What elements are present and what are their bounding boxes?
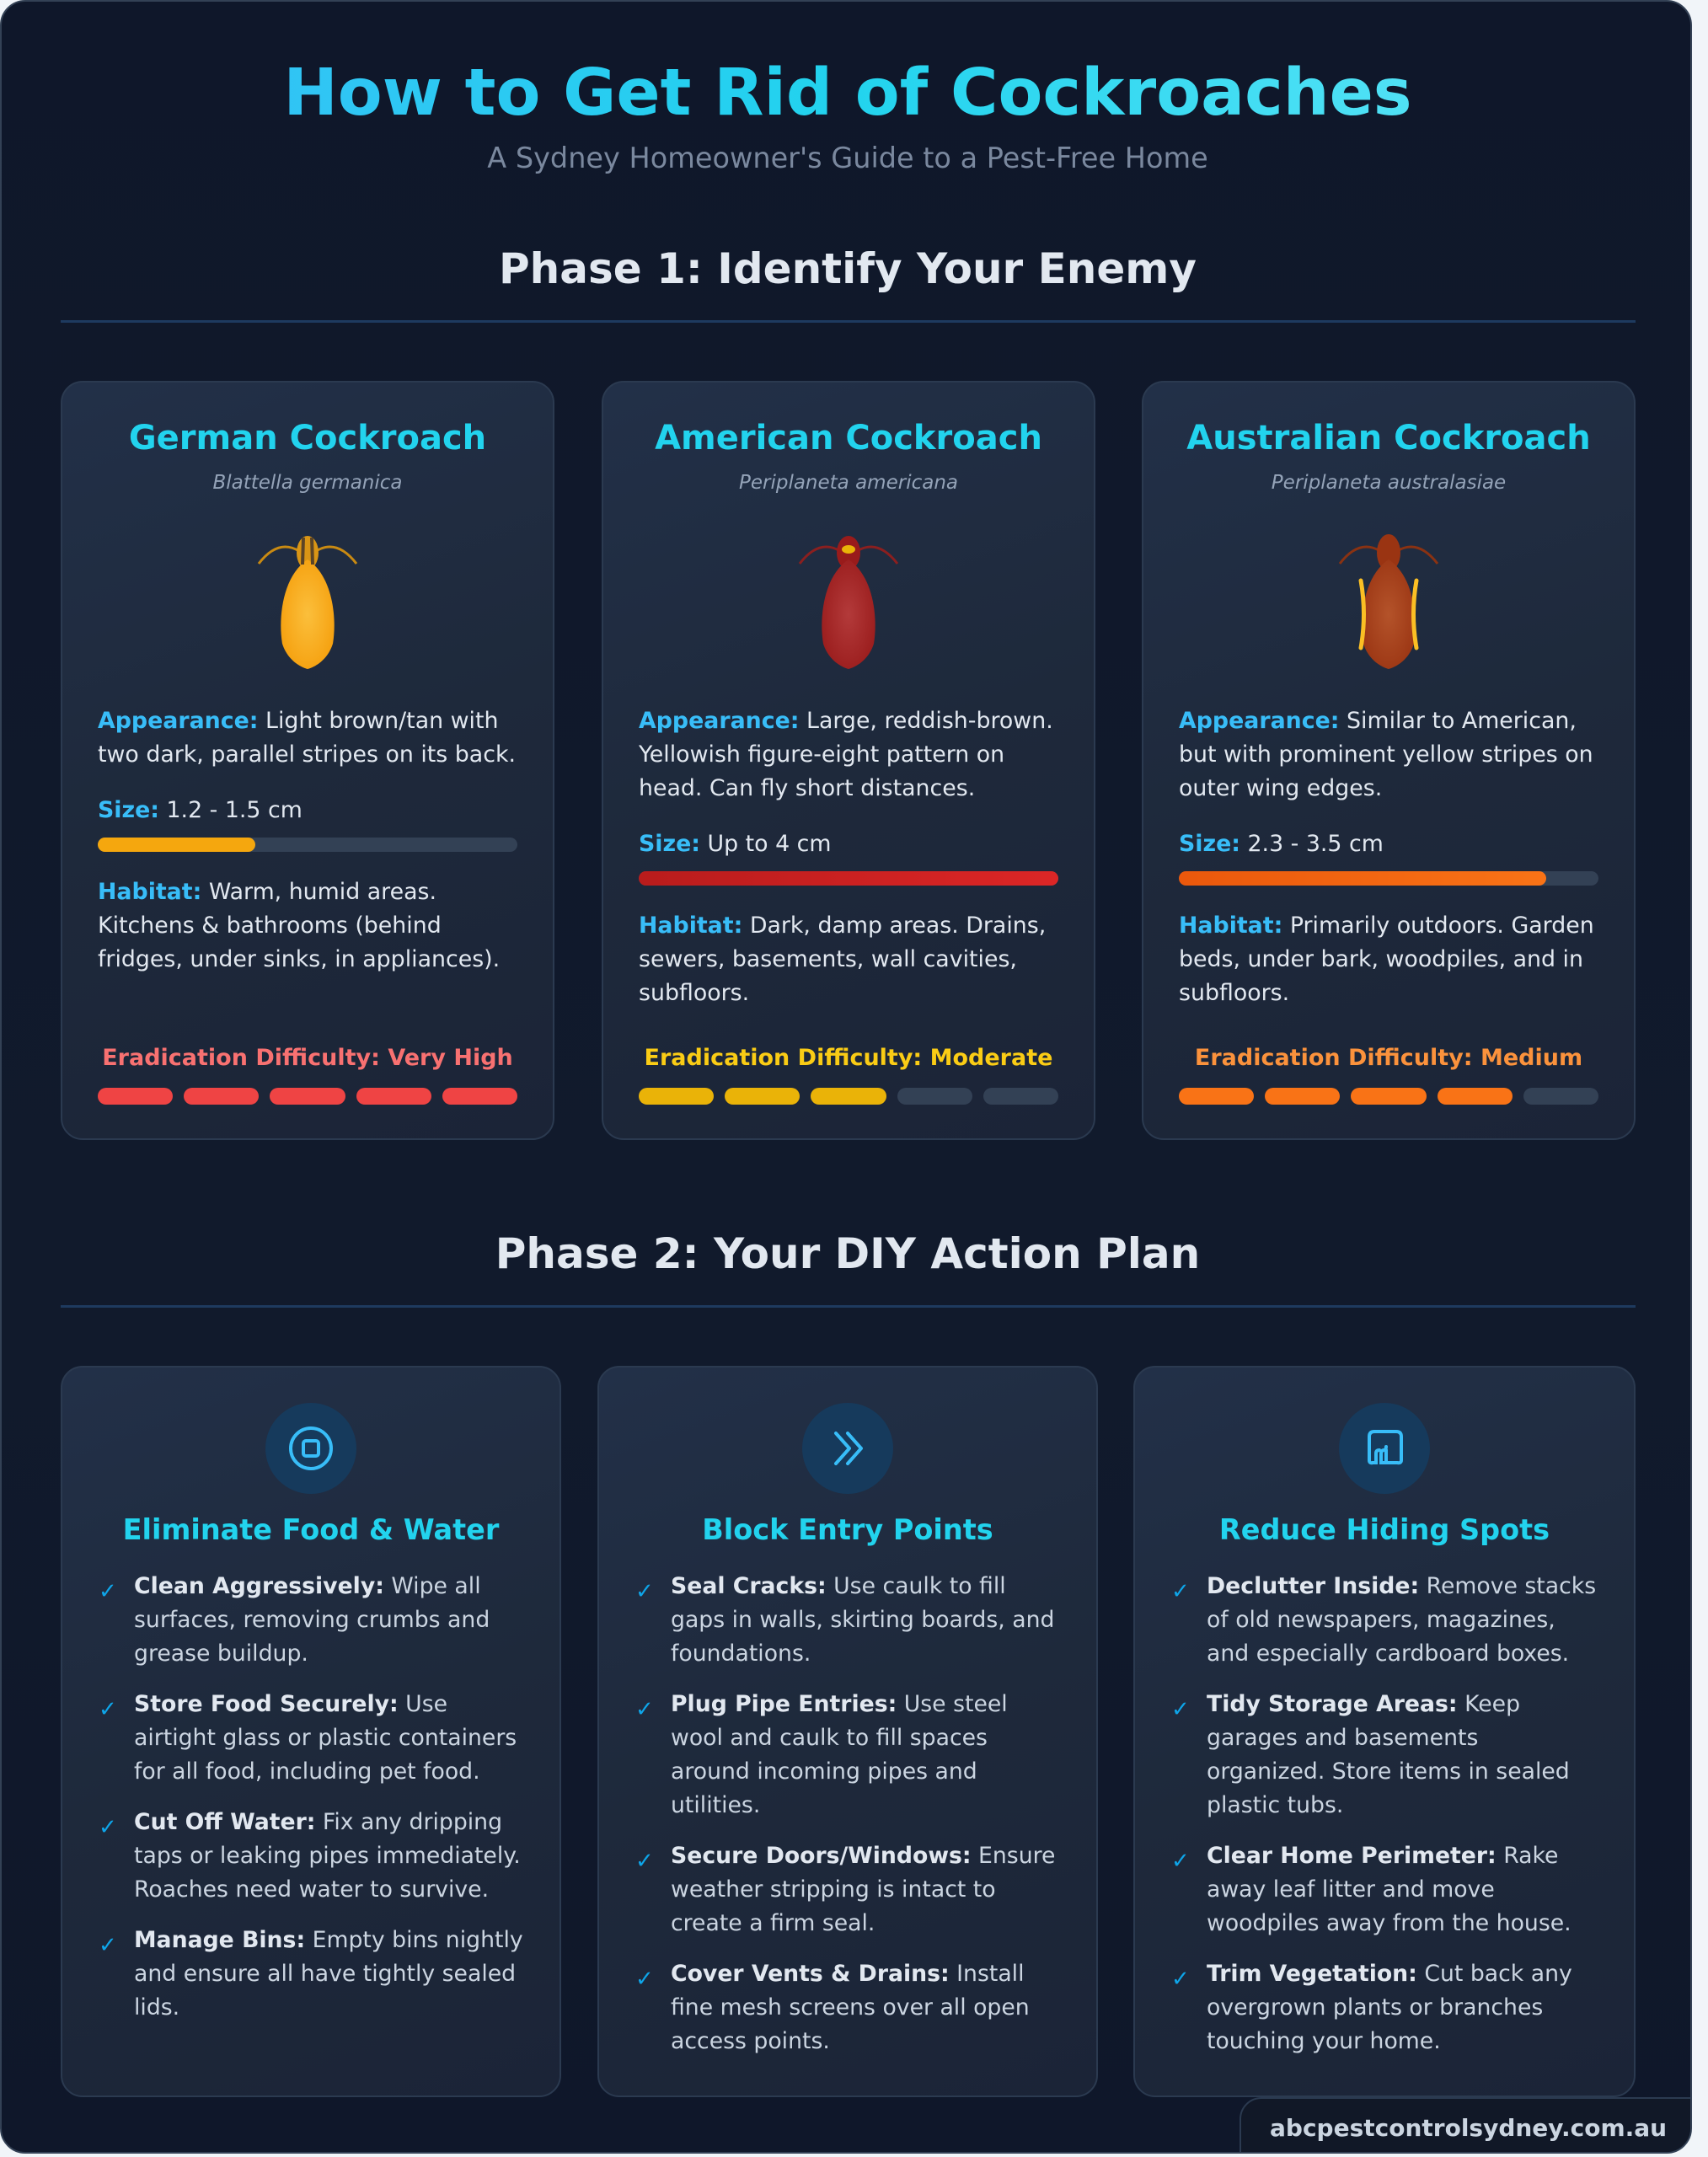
difficulty meter: Eradication Difficulty: Moderate <box>645 1045 1052 1071</box>
panel: block entry points: Cover Vents & Drains: Install fine mesh screens over all open access points. <box>671 1961 1030 2054</box>
subtitle: A Sydney Homeowner's Guide to a Pest-Free Home <box>487 142 1208 174</box>
icon: food <box>265 1403 356 1494</box>
panel: Australian cockroach: Australian Cockroach <box>1186 419 1591 458</box>
panel: block entry points: Secure Doors/Windows: Ensure weather stripping is intact to create a firm seal. <box>671 1843 1055 1936</box>
panel: American cockroach: Habitat: Dark, damp areas. Drains, sewers, basements, wall cavities, subfloors. <box>639 913 1046 1006</box>
panel: eliminate food & water: Store Food Securely: Use airtight glass or plastic containers for all food, including pet food. <box>134 1691 517 1785</box>
panel: block entry points: Plug Pipe Entries: Use steel wool and caulk to fill spaces around incoming pipes and utilities. <box>671 1691 1008 1818</box>
title <box>2 51 1694 136</box>
title: How to Get Rid of Cockroaches <box>283 56 1412 131</box>
icon: australian cockroach <box>1338 534 1439 669</box>
icon: american cockroach <box>799 536 898 669</box>
panel: German cockroach: Blattella germanica <box>212 472 403 494</box>
panel: eliminate food & water: Clean Aggressively: Wipe all surfaces, removing crumbs and grease buildup. <box>134 1573 490 1667</box>
panel: eliminate food & water <box>61 1366 561 2097</box>
panel: reduce hiding spots <box>1133 1366 1636 2097</box>
panel: Australian cockroach: Size: 2.3 - 3.5 cm <box>1179 831 1384 857</box>
panel: Australian cockroach: Habitat: Primarily outdoors. Garden beds, under bark, woodpiles, and in subfloors. <box>1179 913 1594 1006</box>
heading: phase 2: Phase 2: Your DIY Action Plan <box>495 1229 1200 1278</box>
panel: reduce hiding spots: Tidy Storage Areas: Keep garages and basements organized. Store items in sealed plastic tubs. <box>1207 1691 1570 1818</box>
footer: website: abcpestcontrolsydney.com.au <box>1270 2114 1667 2142</box>
panel: German cockroach: Size: 1.2 - 1.5 cm <box>98 797 303 823</box>
panel: block entry points: Block Entry Points <box>702 1513 993 1546</box>
panel: reduce hiding spots: Trim Vegetation: Cut back any overgrown plants or branches touching your home. <box>1207 1961 1572 2054</box>
panel: reduce hiding spots: Declutter Inside: Remove stacks of old newspapers, magazines, and especially cardboard boxes. <box>1207 1573 1596 1667</box>
panel: American cockroach <box>602 381 1095 1140</box>
panel: eliminate food & water: Eliminate Food & Water <box>123 1513 499 1546</box>
panel: German cockroach: German Cockroach <box>129 419 486 458</box>
difficulty meter <box>1179 1045 1598 1105</box>
panel: German cockroach: Habitat: Warm, humid areas. Kitchens & bathrooms (behind fridges, under sinks, in appliances). <box>98 879 500 972</box>
panel: eliminate food & water: Manage Bins: Empty bins nightly and ensure all have tightly sealed lids. <box>134 1927 523 2021</box>
difficulty meter: Eradication Difficulty: Very High <box>102 1045 513 1071</box>
icon: german cockroach <box>258 536 357 669</box>
footer: website <box>1240 2097 1708 2157</box>
panel: American cockroach: Periplaneta americana <box>739 472 958 494</box>
panel: Australian cockroach: Periplaneta australasiae <box>1272 472 1506 494</box>
panel: American cockroach: Appearance: Large, reddish-brown. Yellowish figure-eight pattern on head. Can fly short distances. <box>639 708 1053 801</box>
panel: block entry points: Seal Cracks: Use caulk to fill gaps in walls, skirting boards, and foundations. <box>671 1573 1054 1667</box>
panel: American cockroach: American Cockroach <box>655 419 1042 458</box>
icon: entry <box>802 1403 893 1494</box>
icon: hiding <box>1339 1403 1430 1494</box>
panel: Australian cockroach <box>1142 381 1636 1140</box>
heading: phase 1: Phase 1: Identify Your Enemy <box>499 244 1197 293</box>
panel: German cockroach <box>61 381 554 1140</box>
panel: German cockroach: Appearance: Light brown/tan with two dark, parallel stripes on its back. <box>98 708 516 768</box>
panel: American cockroach: Size: Up to 4 cm <box>639 831 831 857</box>
panel: reduce hiding spots: Reduce Hiding Spots <box>1219 1513 1550 1546</box>
panel: eliminate food & water: Cut Off Water: Fix any dripping taps or leaking pipes immediately. Roaches need water to survive. <box>134 1809 521 1903</box>
difficulty meter <box>639 1045 1058 1105</box>
panel: block entry points <box>597 1366 1098 2097</box>
panel: Australian cockroach: Appearance: Similar to American, but with prominent yellow stripes on outer wing edges. <box>1179 708 1593 801</box>
panel: reduce hiding spots: Clear Home Perimeter: Rake away leaf litter and move woodpiles away from the house. <box>1207 1843 1571 1936</box>
difficulty meter: Eradication Difficulty: Medium <box>1195 1045 1582 1071</box>
difficulty meter <box>98 1045 517 1105</box>
